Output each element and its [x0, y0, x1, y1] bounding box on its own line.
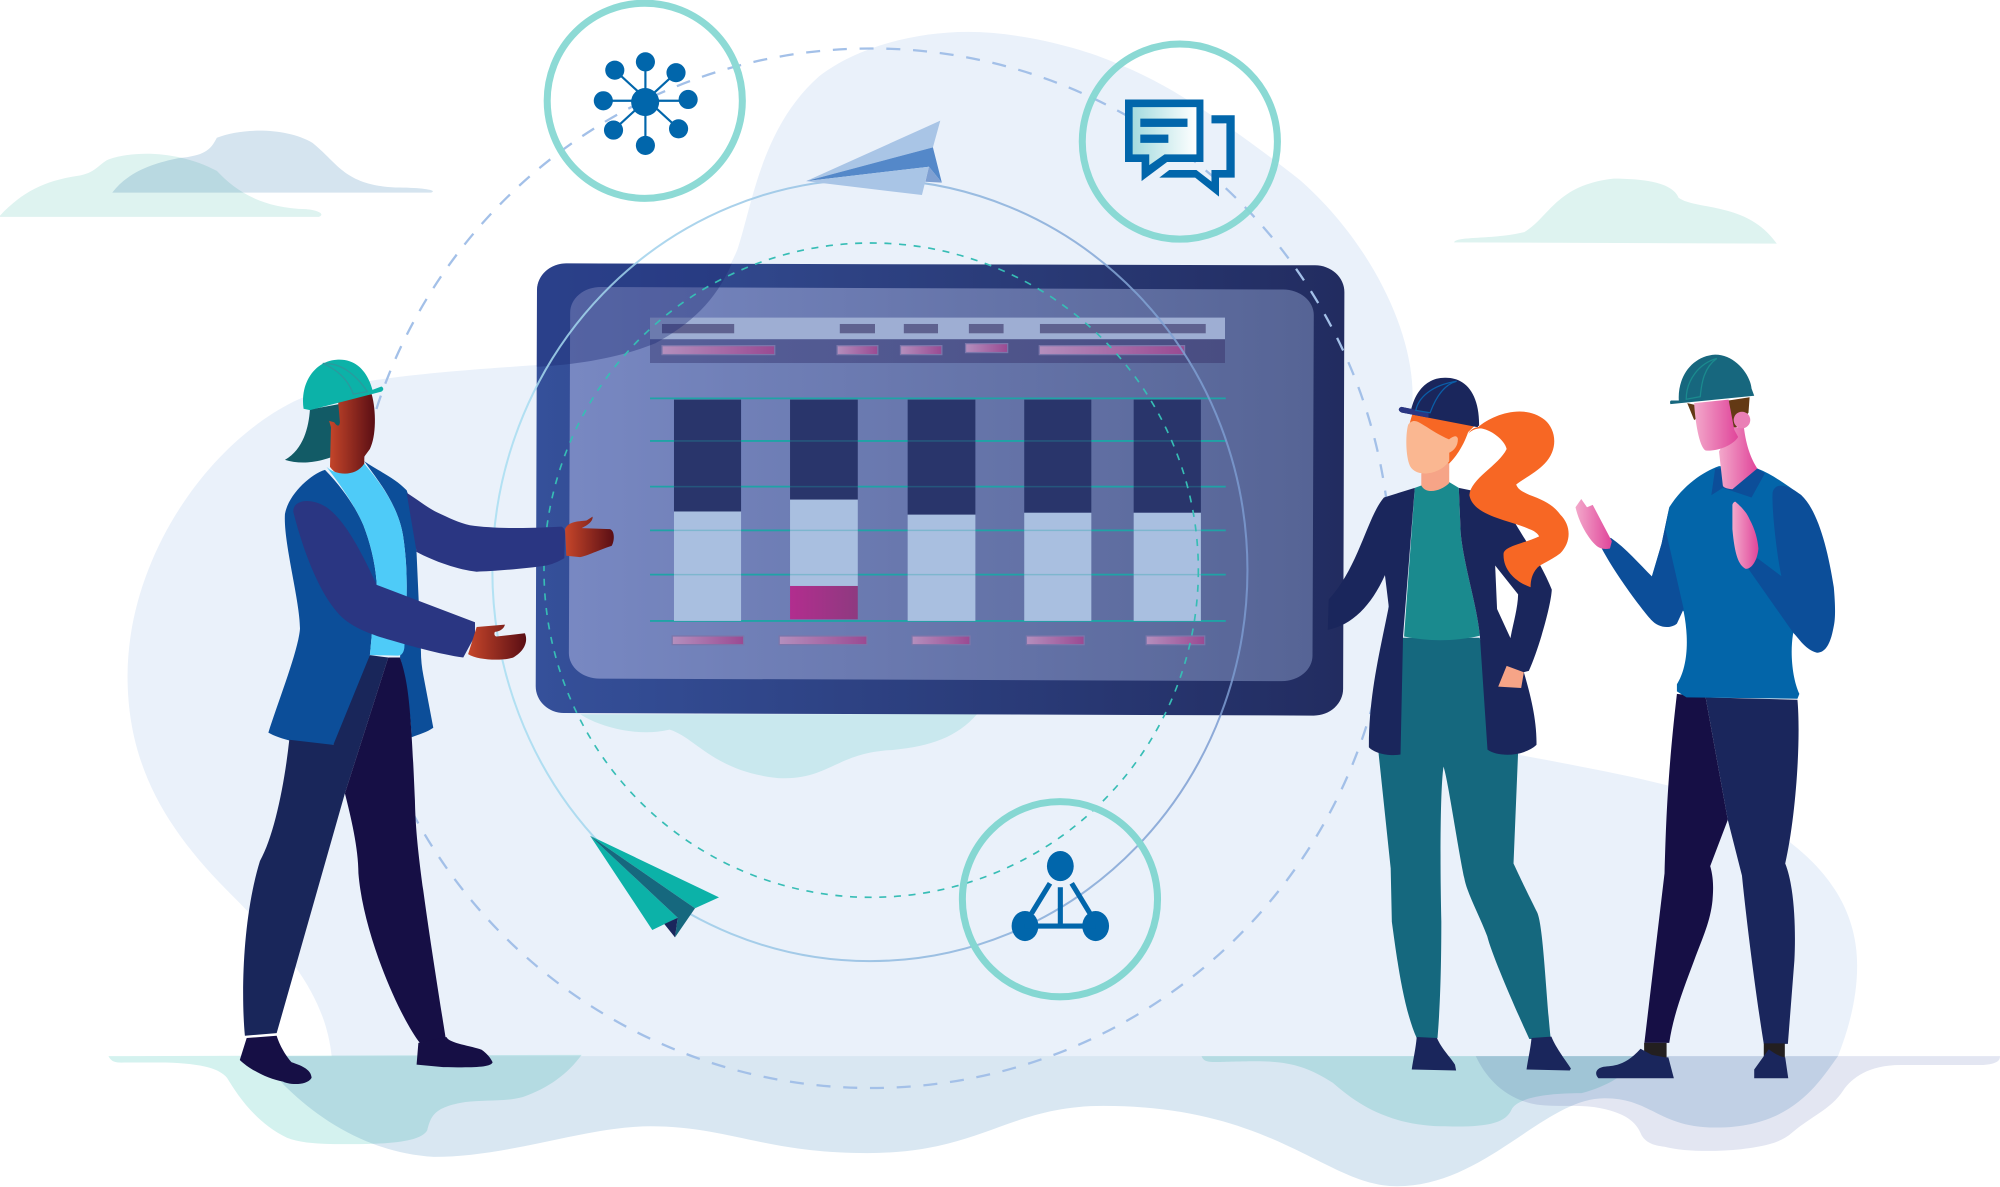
leg: back [243, 655, 388, 1036]
jacket [1328, 488, 1552, 755]
icon: network nodes [594, 52, 698, 155]
neck [1421, 461, 1449, 491]
socks [1644, 1043, 1785, 1059]
icon circle: people triangle [962, 802, 1158, 997]
sweater [1652, 466, 1801, 699]
icon: connected people [1012, 851, 1109, 941]
table header bar [650, 318, 1225, 339]
cloud: top left blue [112, 131, 433, 193]
collar [1711, 468, 1765, 497]
outer dashed orbit [351, 48, 1391, 1088]
hair behind face [1407, 411, 1474, 464]
hand: upper [565, 517, 614, 557]
cloud: top right teal [1454, 179, 1777, 244]
hard hat [303, 360, 383, 410]
panel top-left shading [536, 263, 732, 367]
inner dashed orbit [544, 243, 1198, 897]
hair [285, 403, 344, 463]
face [1694, 400, 1738, 451]
teal blob under dashboard [580, 714, 977, 778]
arm: upper [407, 493, 565, 572]
shoes [1412, 1037, 1571, 1071]
screen [569, 287, 1314, 681]
icon circle: chat [1082, 44, 1277, 239]
hair [1687, 397, 1750, 430]
icon circle: network [547, 3, 742, 198]
ground: pale purple right wave [1476, 1056, 2000, 1151]
arm: right sleeve [1748, 486, 1835, 653]
ground: teal right puddle [1202, 1056, 1645, 1127]
leg: back [1644, 694, 1728, 1043]
hand in pocket [1498, 666, 1524, 688]
leg: front [345, 658, 446, 1043]
arm: left sleeve [1600, 507, 1684, 627]
icon: chat bubbles [1125, 99, 1235, 197]
face [1406, 421, 1458, 473]
hard hat [1670, 355, 1754, 404]
face and neck [329, 394, 375, 477]
table value row [650, 339, 1225, 363]
dashboard panel [523, 250, 1344, 716]
cloud: top left teal [0, 154, 321, 217]
figure: man talking [1576, 355, 1835, 1078]
shirt [1404, 482, 1480, 640]
t-shirt [327, 464, 407, 656]
figure: woman with ponytail [1328, 378, 1571, 1071]
background blob [128, 32, 1857, 1056]
trousers [1378, 638, 1551, 1039]
arm: lower [293, 501, 475, 658]
hand: chest [1732, 502, 1758, 569]
leg: front [1706, 697, 1799, 1044]
hand: raised [1576, 499, 1612, 549]
hard hat [1399, 378, 1479, 427]
middle solid orbit [492, 179, 1247, 961]
neck [1719, 427, 1757, 489]
bar axis labels [672, 636, 1205, 645]
hole between arm and body [1495, 565, 1518, 638]
ear [1734, 412, 1750, 428]
ponytail [1468, 411, 1569, 587]
stacked bar chart [650, 398, 1226, 621]
hand: lower [468, 625, 526, 660]
paper plane: teal [590, 836, 719, 937]
shoes [1596, 1049, 1788, 1078]
ground: blue wave [261, 1056, 1838, 1186]
ground: teal left puddle [108, 1055, 582, 1144]
jacket [268, 461, 433, 745]
paper plane: blue [806, 121, 942, 195]
panel frame [536, 263, 1344, 716]
figure: left worker presenting [240, 360, 614, 1084]
shoes [240, 1036, 493, 1084]
